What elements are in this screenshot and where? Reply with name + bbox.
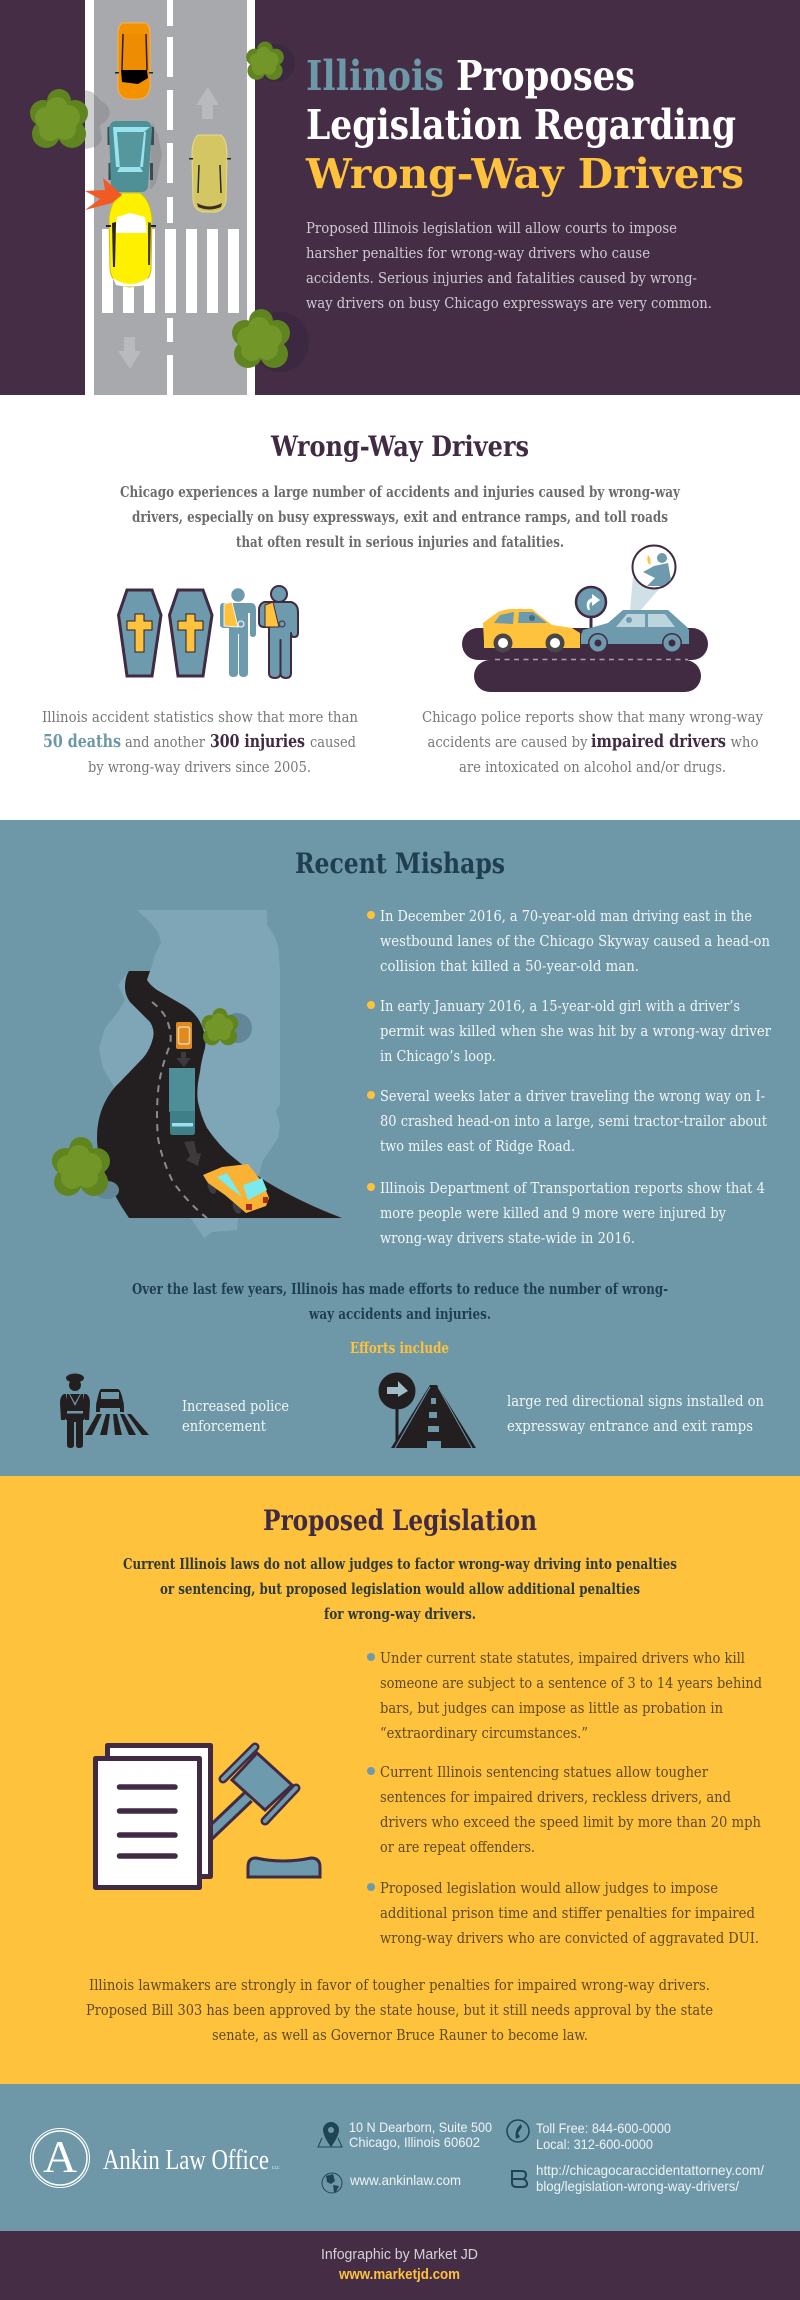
text block: lawmakers: Proposed Bill 303 has been approved by the state house, but it still needs approval by the state bbox=[86, 2003, 713, 2019]
icon: police officer bbox=[60, 1374, 149, 1448]
icon: phone bbox=[507, 2120, 529, 2142]
bullet list: mishaps: more people were killed and 9 more were injured by bbox=[380, 1206, 727, 1222]
text block: intro: drivers, especially on busy expressways, exit and entrance ramps, and toll roads bbox=[132, 509, 668, 526]
text block: address: 10 N Dearborn, Suite 500 bbox=[349, 2119, 492, 2135]
illustration: winding road bbox=[97, 971, 342, 1218]
logo: Ankin Law Office: A bbox=[43, 2131, 77, 2182]
title: Proposes bbox=[456, 52, 635, 100]
bullet list: mishaps: westbound lanes of the Chicago Skyway caused a head-on bbox=[380, 934, 770, 950]
icon: crash burst bbox=[85, 178, 122, 210]
title: Wrong-Way Drivers bbox=[305, 150, 744, 198]
logo: Ankin Law Office: Ankin Law Office bbox=[103, 2144, 269, 2176]
bullet list: mishaps bbox=[367, 909, 771, 1247]
text block: accident statistics bbox=[42, 710, 358, 776]
bullet list: legislation: Current Illinois sentencing statues allow tougher bbox=[380, 1765, 708, 1781]
icon: orange car on road bbox=[176, 1022, 192, 1049]
icon: impaired driver collision bbox=[462, 546, 708, 692]
bullet list: legislation: Under current state statutes, impaired drivers who kill bbox=[380, 1651, 745, 1667]
text block: phone numbers: Toll Free: 844-600-0000 bbox=[536, 2120, 671, 2136]
icon: tree top right bbox=[246, 42, 284, 80]
text block: hero intro: accidents. Serious injuries and fatalities caused by wrong- bbox=[306, 271, 697, 287]
icon: location pin bbox=[318, 2122, 342, 2147]
text block: lawmakers bbox=[86, 1978, 713, 2044]
bullet list: mishaps: In December 2016, a 70-year-old man driving east in the bbox=[380, 909, 752, 925]
icon: globe bbox=[322, 2173, 342, 2193]
text block: directional signs bbox=[507, 1394, 764, 1435]
text block: police reports bbox=[422, 710, 764, 776]
icon: tree bottom right bbox=[232, 309, 290, 368]
text block: police reports: accidents are caused by bbox=[428, 735, 588, 751]
bullet list: legislation: bars, but judges can impose as little as probation in bbox=[380, 1701, 723, 1717]
text block: efforts intro bbox=[132, 1281, 668, 1323]
panel: contact footer bbox=[0, 2084, 800, 2231]
text block: police reports: impaired drivers bbox=[591, 731, 726, 752]
logo: Ankin Law Office bbox=[30, 2128, 280, 2188]
text block: address bbox=[349, 2119, 492, 2150]
icon: yellow car bbox=[106, 193, 156, 287]
text block: hero intro bbox=[306, 221, 712, 312]
stat: 50 deaths: 50 deaths bbox=[43, 731, 121, 752]
text block: lawmakers: senate, as well as Governor Bruce Rauner to become law. bbox=[212, 2028, 588, 2044]
bullet list: mishaps: In early January 2016, a 15-year-old girl with a driver’s bbox=[380, 999, 740, 1015]
text block: directional signs: expressway entrance and exit ramps bbox=[507, 1419, 753, 1435]
text block: police enforcement: Increased police bbox=[182, 1399, 289, 1415]
map: Illinois outline bbox=[99, 910, 280, 1238]
text block: police reports: are intoxicated on alcohol and/or drugs. bbox=[459, 760, 726, 776]
text block: accident statistics: caused bbox=[310, 735, 356, 751]
text block: phone numbers: Local: 312-600-0000 bbox=[536, 2136, 653, 2152]
text block: hero intro: Proposed Illinois legislation will allow courts to impose bbox=[306, 221, 677, 237]
panel: wrong-way drivers bbox=[0, 395, 800, 820]
text block: efforts intro: Over the last few years, Illinois has made efforts to reduce the number of wrong- bbox=[132, 1281, 668, 1298]
icon: khaki car bbox=[189, 135, 231, 212]
text block: directional signs: large red directional signs installed on bbox=[507, 1394, 764, 1410]
panel: proposed legislation bbox=[0, 1476, 800, 2084]
icon: directional sign and road bbox=[378, 1372, 476, 1448]
text block: blog link bbox=[536, 2162, 764, 2194]
text block: blog link: http://chicagocaraccidentattorney.com/ bbox=[536, 2162, 764, 2178]
bullet list: mishaps: two miles east of Ridge Road. bbox=[380, 1139, 575, 1155]
text block: intro: that often result in serious injuries and fatalities. bbox=[236, 534, 564, 551]
text block: accident statistics: Illinois accident statistics show that more than bbox=[42, 710, 358, 726]
icon: coffins and injured people bbox=[118, 586, 298, 678]
text block: police reports: Chicago police reports show that many wrong-way bbox=[422, 710, 764, 726]
icon: teal car bbox=[108, 121, 154, 192]
bullet list: legislation: someone are subject to a sentence of 3 to 14 years behind bbox=[380, 1676, 762, 1692]
icon: blog bbox=[512, 2171, 527, 2187]
text block: address: Chicago, Illinois 60602 bbox=[349, 2134, 480, 2150]
bullet list: legislation: “extraordinary circumstances.” bbox=[380, 1726, 588, 1742]
text block: police enforcement bbox=[182, 1399, 289, 1435]
icon: taxi bbox=[203, 1164, 269, 1215]
text block: blog link: blog/legislation-wrong-way-drivers/ bbox=[536, 2178, 739, 2194]
text block: efforts intro: way accidents and injuries. bbox=[308, 1306, 491, 1323]
bullet list: legislation: drivers who exceed the speed limit by more than 20 mph bbox=[380, 1815, 761, 1831]
logo: Ankin Law Office: LLC bbox=[272, 2165, 280, 2170]
text: website: www.ankinlaw.com bbox=[349, 2172, 461, 2188]
text block: lawmakers: Illinois lawmakers are strongly in favor of tougher penalties for impaired wrong-way drivers. bbox=[89, 1978, 710, 1994]
icon: orange car bbox=[115, 23, 153, 99]
subheading: efforts include: Efforts include bbox=[350, 1340, 449, 1357]
text block: hero intro: way drivers on busy Chicago expressways are very common. bbox=[306, 296, 712, 312]
icon: map trees bbox=[52, 1008, 252, 1199]
text block: intro bbox=[123, 1556, 677, 1623]
text block: intro bbox=[120, 484, 680, 551]
stat: 300 injuries: 300 injuries bbox=[210, 731, 305, 752]
tree shadows bbox=[85, 44, 309, 372]
text: credit: Infographic by Market JD bbox=[321, 2246, 478, 2263]
heading: Wrong-Way Drivers bbox=[270, 430, 529, 463]
bullet list: mishaps: wrong-way drivers state-wide in 2016. bbox=[380, 1231, 635, 1247]
icon: truck bbox=[169, 1068, 195, 1135]
text block: intro: for wrong-way drivers. bbox=[324, 1606, 476, 1623]
bullet list: legislation: or are repeat offenders. bbox=[380, 1840, 535, 1856]
text block: phone numbers bbox=[536, 2120, 671, 2152]
text block: police reports: who bbox=[730, 735, 758, 751]
bullet list: mishaps: permit was killed when she was hit by a wrong-way driver bbox=[380, 1024, 771, 1040]
text block: hero intro: harsher penalties for wrong-way drivers who cause bbox=[306, 246, 650, 262]
title bbox=[305, 52, 744, 198]
icon: gavel and documents bbox=[96, 1746, 320, 1888]
text block: accident statistics: by wrong-way drivers since 2005. bbox=[88, 760, 311, 776]
text block: intro: or sentencing, but proposed legislation would allow additional penalties bbox=[160, 1581, 640, 1598]
bullet list: mishaps: Illinois Department of Transportation reports show that 4 bbox=[380, 1181, 765, 1197]
bullet list: legislation: additional prison time and stiffer penalties for impaired bbox=[380, 1906, 755, 1922]
bullet list: mishaps: in Chicago’s loop. bbox=[380, 1049, 496, 1065]
bullet list: legislation: Proposed legislation would allow judges to impose bbox=[380, 1881, 718, 1897]
icon: tree left bbox=[30, 89, 88, 148]
illustration: road bbox=[85, 0, 255, 395]
bullet list: mishaps: collision that killed a 50-year-old man. bbox=[380, 959, 639, 975]
panel: hero bbox=[0, 0, 800, 395]
bullet list: mishaps: Several weeks later a driver traveling the wrong way on I- bbox=[380, 1089, 765, 1105]
bullet list: legislation: wrong-way drivers who are convicted of aggravated DUI. bbox=[380, 1931, 759, 1947]
title: Illinois bbox=[306, 52, 444, 100]
text block: accident statistics: and another bbox=[125, 735, 205, 751]
heading: Proposed Legislation bbox=[263, 1504, 537, 1537]
bullet list: legislation: sentences for impaired drivers, reckless drivers, and bbox=[380, 1790, 731, 1806]
panel: recent mishaps bbox=[0, 820, 800, 1476]
panel: credit bar bbox=[0, 2231, 800, 2300]
text block: intro: Chicago experiences a large number of accidents and injuries caused by wrong-way bbox=[120, 484, 680, 501]
text: credit url: www.marketjd.com bbox=[338, 2267, 460, 2283]
heading: Recent Mishaps bbox=[295, 847, 505, 880]
bullet list: mishaps: 80 crashed head-on into a large, semi tractor-trailor about bbox=[380, 1114, 767, 1130]
text block: intro: Current Illinois laws do not allow judges to factor wrong-way driving into penalties bbox=[123, 1556, 677, 1573]
bullet list: legislation bbox=[367, 1651, 762, 1947]
text block: police enforcement: enforcement bbox=[182, 1419, 266, 1435]
